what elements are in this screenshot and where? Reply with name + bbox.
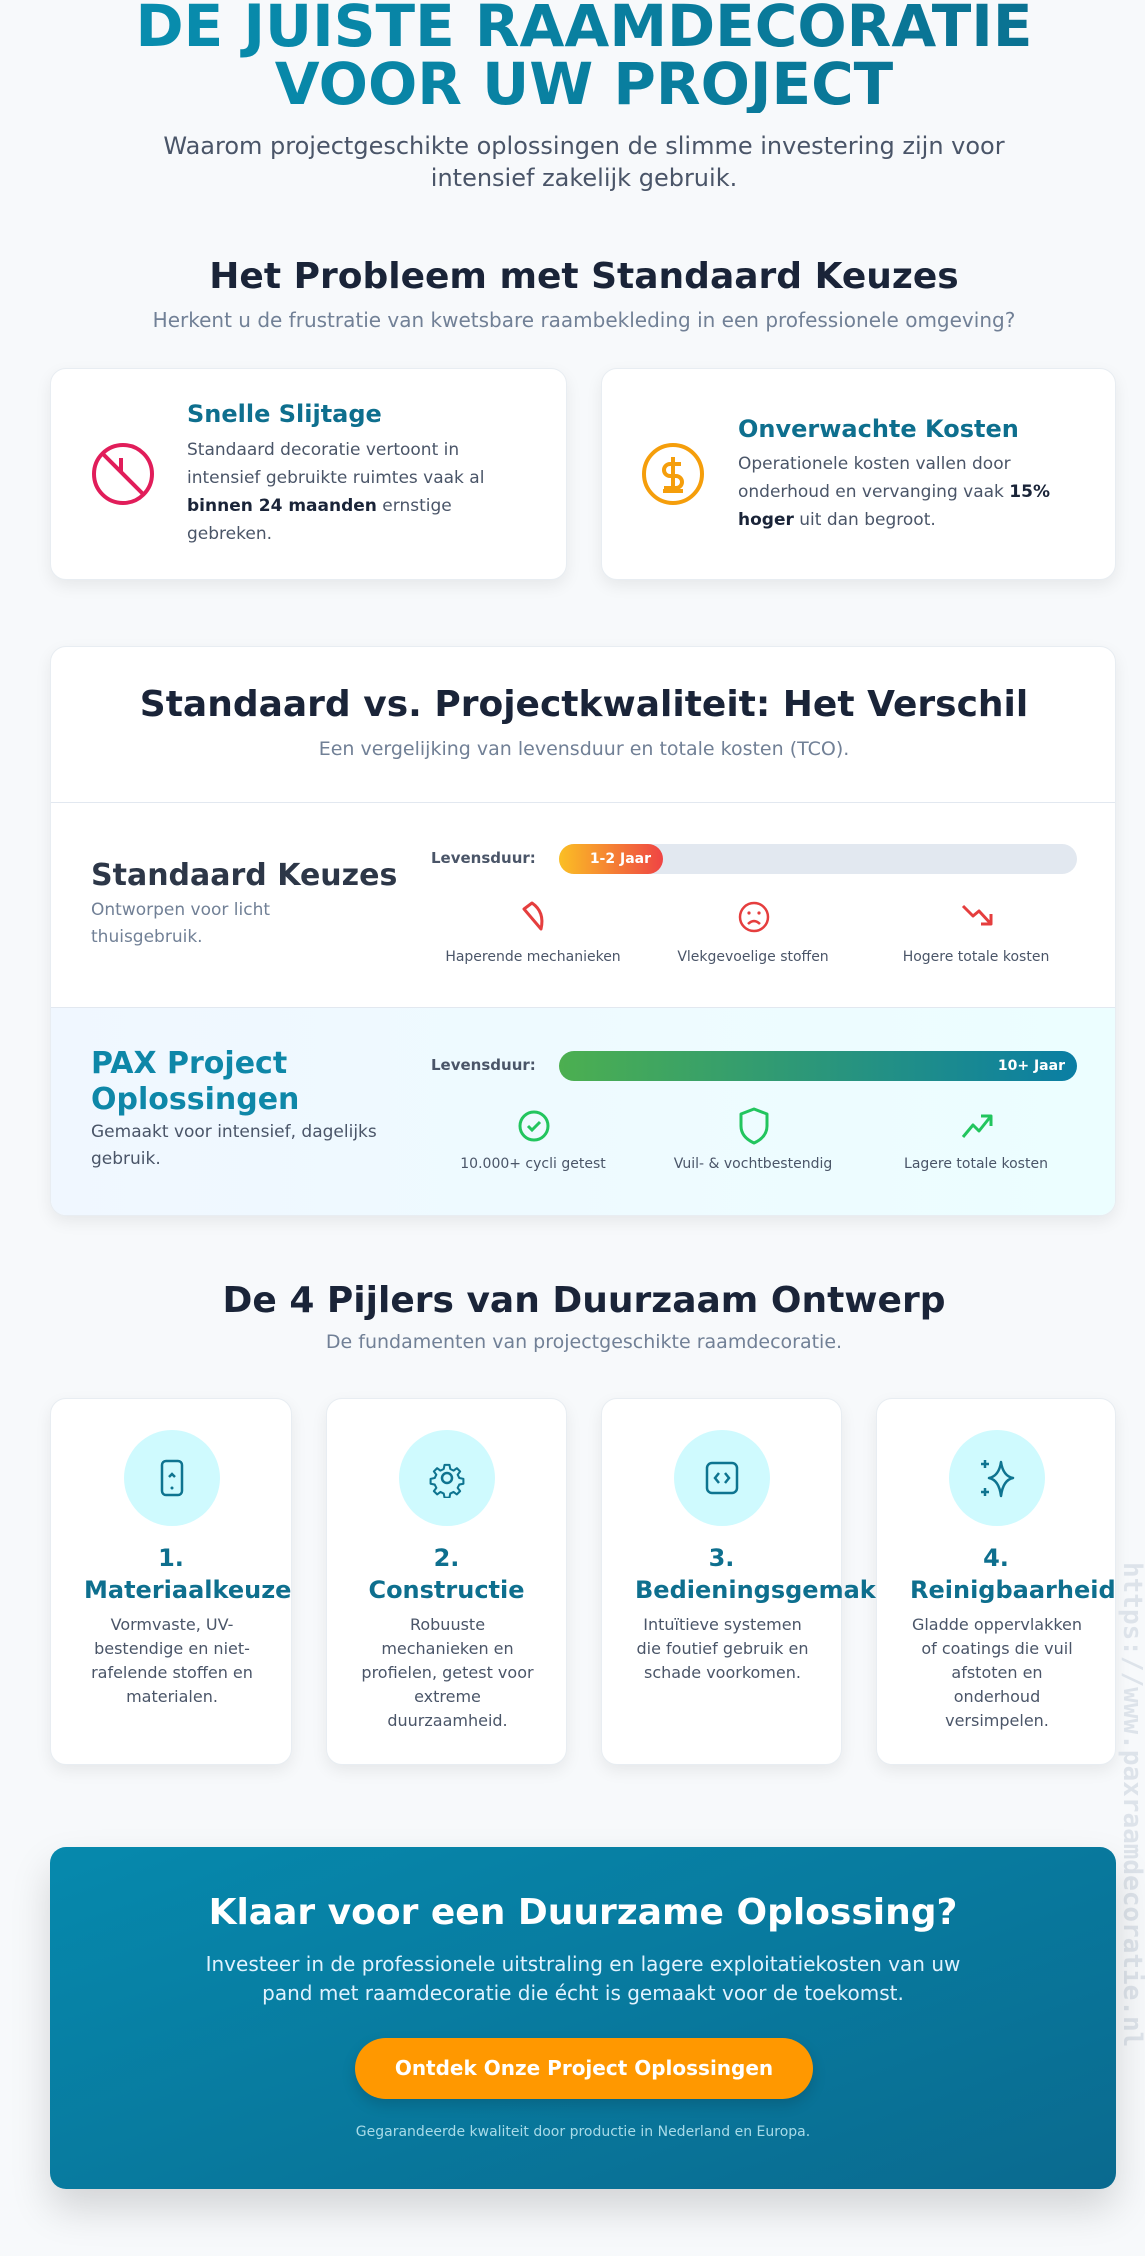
label pax: Oplossingen (91, 1082, 299, 1117)
cta text: Investeer in de professionele uitstraling en lagere exploitatiekosten van uw pand met raamdecoratie die écht is gemaakt voor de toekomst. (206, 1952, 960, 2005)
pillars subtitle: De fundamenten van projectgeschikte raamdecoratie. (326, 1331, 842, 1353)
bar: 10+ jaar: 10+ Jaar (998, 1058, 1065, 1074)
label: Vuil- & vochtbestendig (674, 1156, 832, 1172)
text: Robuuste mechanieken en profielen, getest voor extreme duurzaamheid. (361, 1615, 534, 1730)
icon: sad (738, 902, 770, 932)
label: Hogere totale kosten (903, 949, 1049, 965)
icon: shield (740, 1108, 768, 1144)
icon: check (518, 1110, 550, 1142)
icon: dollar (642, 443, 704, 505)
description: Ontworpen voor licht thuisgebruik. (91, 900, 270, 947)
title: onverwachte kosten: Onverwachte Kosten (738, 415, 1019, 443)
subtitle: Waarom projectgeschikte oplossingen de slimme investering zijn voor intensief zakelijk gebruik. (163, 132, 1005, 192)
title: 4. (983, 1544, 1009, 1572)
button (355, 2038, 813, 2099)
title (0, 0, 1145, 113)
bar: 1-2 jaar: 1-2 Jaar (590, 851, 651, 867)
text: Gladde oppervlakken of coatings die vuil afstoten en onderhoud versimpelen. (912, 1615, 1082, 1730)
icon: code box (674, 1430, 770, 1526)
heading: pillars: De 4 Pijlers van Duurzaam Ontwerp (222, 1280, 946, 1321)
text: Intuïtieve systemen die foutief gebruik en schade voorkomen. (636, 1615, 809, 1682)
panel: onverwachte kosten (601, 368, 1116, 580)
row: pax (51, 1008, 1117, 1217)
comparison subtitle: Een vergelijking van levensduur en totale kosten (TCO). (319, 738, 849, 760)
pillar 3 (601, 1398, 842, 1765)
description: Gemaakt voor intensief, dagelijks gebruik. (91, 1122, 377, 1169)
label standaard: Standaard Keuzes (91, 858, 397, 893)
panel: call to action (50, 1847, 1116, 2189)
pillar 2 (326, 1398, 567, 1765)
label: Lagere totale kosten (904, 1156, 1048, 1172)
icon: prohibited (92, 443, 154, 505)
label: Haperende mechanieken (445, 949, 621, 965)
title: 2. (434, 1544, 459, 1572)
footnote: Gegarandeerde kwaliteit door productie in Nederland en Europa. (356, 2124, 810, 2140)
icon: gear (399, 1430, 495, 1526)
label: Vlekgevoelige stoffen (677, 949, 829, 965)
title: Materiaalkeuze (84, 1576, 291, 1604)
heading: problem: Het Probleem met Standaard Keuzes (209, 256, 959, 297)
title: Bedieningsgemak (635, 1576, 876, 1604)
label pax (91, 1046, 299, 1117)
panel: snelle slijtage (50, 368, 567, 580)
pillar 4 (876, 1398, 1116, 1765)
title (368, 1544, 525, 1604)
text: Standaard decoratie vertoont in intensief gebruikte ruimtes vaak al binnen 24 maanden ernstige gebreken. (187, 440, 484, 544)
text: Operationele kosten vallen door onderhoud en vervanging vaak 15% hoger uit dan begroot. (738, 454, 1050, 530)
icon: broken (522, 902, 544, 930)
label: 10.000+ cycli getest (460, 1156, 606, 1172)
cta heading: Klaar voor een Duurzame Oplossing? (209, 1892, 957, 1933)
label levensduur: Levensduur: (431, 849, 536, 867)
icon: trend down (962, 905, 992, 926)
title: Reinigbaarheid (910, 1576, 1116, 1604)
label pax: PAX Project (91, 1046, 287, 1081)
title (635, 1544, 876, 1604)
icon: sparkles (949, 1430, 1045, 1526)
bar: 10+ jaar (559, 1051, 1077, 1081)
title: VOOR UW PROJECT (275, 50, 893, 118)
title: 3. (709, 1544, 734, 1572)
icon: trend up (962, 1114, 992, 1138)
pillar 1 (50, 1398, 292, 1765)
title: Constructie (368, 1576, 525, 1604)
comparison heading: Standaard vs. Projectkwaliteit: Het Verschil (140, 684, 1028, 725)
text: Vormvaste, UV-bestendige en niet-rafelende stoffen en materialen. (91, 1615, 253, 1706)
button: Ontdek Onze Project Oplossingen (395, 2056, 773, 2080)
label levensduur: Levensduur: (431, 1056, 536, 1074)
panel: comparison (50, 646, 1116, 1216)
title (84, 1544, 291, 1604)
icon: phone (124, 1430, 220, 1526)
bar: 1-2 jaar (559, 844, 1077, 874)
title (910, 1544, 1116, 1604)
row: standaard (51, 802, 1117, 1008)
title: snelle slijtage: Snelle Slijtage (187, 400, 382, 428)
problem subtitle: Herkent u de frustratie van kwetsbare raambekleding in een professionele omgeving? (153, 308, 1015, 332)
title: 1. (158, 1544, 184, 1572)
